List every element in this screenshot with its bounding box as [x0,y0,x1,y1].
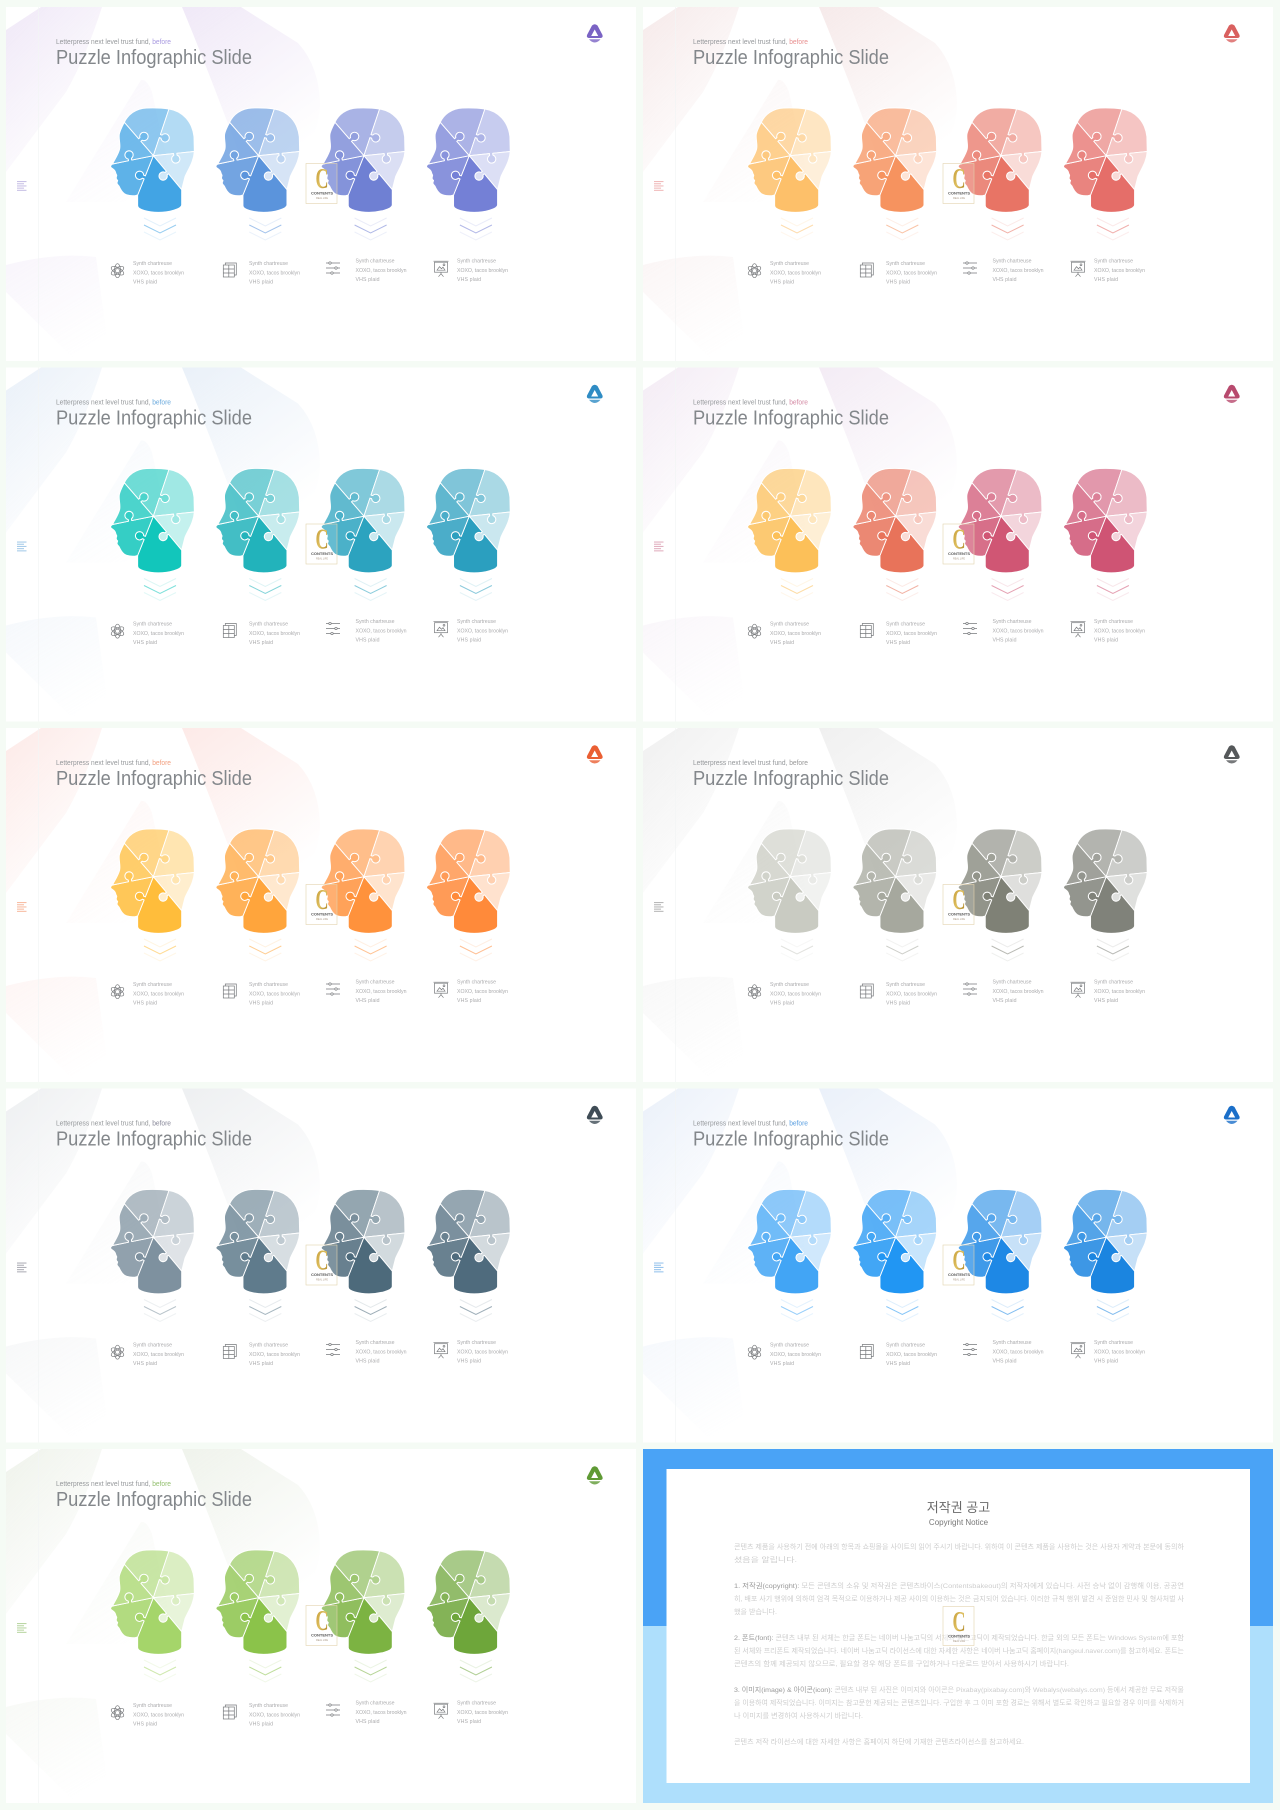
watermark: REAL LIFE [953,197,965,200]
caption 2: Synth chartreuse [886,622,925,628]
caption 4: Synth chartreuse [457,1340,496,1346]
caption 2: Synth chartreuse [249,1703,288,1709]
slide 6: warm grey [643,728,1273,1082]
background logo shapes [6,368,320,722]
slide 10: copyright notice [643,1449,1273,1803]
head 3 [321,829,405,961]
icon: presentation [434,1703,448,1719]
caption 1: Synth chartreuse [770,1342,809,1348]
watermark: CONTENTS [948,912,971,916]
caption 4: VHS plaid [457,998,481,1004]
caption 1: VHS plaid [770,1361,794,1367]
title: Puzzle Infographic Slide [56,1489,252,1511]
icon: presentation [434,982,448,998]
head 4 [1064,1189,1147,1322]
caption 3: XOXO, tacos brooklyn [992,628,1044,634]
caption 2: Synth chartreuse [249,1342,288,1348]
caption 3: VHS plaid [356,277,380,283]
icon: presentation [434,1343,448,1358]
head 4 [427,1189,510,1322]
caption 3: XOXO, tacos brooklyn [356,268,407,274]
head 3 [958,1189,1042,1322]
intro paragraph: 콘텐츠 제품을 사용하기 전에 아래의 항목과 쇼핑몰을 사이트의 읽어 주시기 바랍니다. 위하여 이 콘텐츠 제품을 사용하는 것은 사용자 계약과 본문에 동의하 [734,1542,1184,1551]
sidebar icon [654,902,664,912]
paragraph 3: image and icon: 나 이미지를 변경하여 사용하시기 바랍니다. [734,1711,863,1720]
caption 4: VHS plaid [457,1719,481,1725]
watermark: C [316,163,328,195]
watermark: REAL LIFE [316,558,328,560]
watermark: CONTENTS [311,912,334,916]
watermark: C [316,1244,328,1276]
caption 3: Synth chartreuse [356,1340,395,1346]
sidebar icon [17,542,26,551]
caption 4: Synth chartreuse [1094,980,1133,986]
title: Puzzle Infographic Slide [693,47,889,69]
caption 1: Synth chartreuse [770,982,809,988]
caption 1: XOXO, tacos brooklyn [770,270,821,276]
sidebar icon [17,902,26,912]
icon: sliders [326,1704,340,1716]
caption 1: XOXO, tacos brooklyn [133,991,184,997]
slide 8: blue [643,1088,1273,1442]
watermark [306,163,337,204]
watermark: CONTENTS [311,192,334,196]
subtitle: Letterpress next level trust fund, before [693,758,808,767]
logo [587,385,603,403]
caption 3: VHS plaid [992,638,1017,644]
caption 4: Synth chartreuse [1094,619,1133,625]
caption 1: XOXO, tacos brooklyn [133,631,184,637]
logo [587,1466,603,1484]
icon: atom [110,1706,125,1720]
head 2 [216,829,300,961]
head 2 [216,468,300,600]
caption 4: Synth chartreuse [457,1700,496,1706]
caption 1: Synth chartreuse [770,622,809,628]
caption 3: Synth chartreuse [992,619,1032,625]
watermark [943,1606,974,1646]
caption 4: Synth chartreuse [457,980,496,986]
caption 1: Synth chartreuse [133,622,172,628]
subtitle: Letterpress next level trust fund, before [693,1118,808,1128]
white notice card [666,1469,1250,1783]
paragraph 2: font: 콘텐츠의 함께 제공되지 않으므로, 필요할 경우 해당 폰트를 구입하거나 다운로드 받아서 사용하시기 바랍니다. [734,1659,1069,1668]
subtitle: Letterpress next level trust fund, before [56,1479,171,1488]
watermark: REAL LIFE [953,1640,965,1643]
icon: sliders [326,622,340,635]
sidebar icon [17,1623,26,1633]
subtitle: Letterpress next level trust fund, before [693,398,808,406]
caption 1: XOXO, tacos brooklyn [770,991,821,997]
caption 1: XOXO, tacos brooklyn [133,1352,184,1358]
icon: layers [860,1344,873,1358]
watermark [306,1244,337,1285]
caption 3: VHS plaid [356,638,380,644]
caption 2: XOXO, tacos brooklyn [886,991,937,997]
caption 2: XOXO, tacos brooklyn [249,631,300,637]
caption 3: Synth chartreuse [992,980,1032,986]
notice title: 저작권 공고 [927,1500,990,1515]
watermark: C [952,163,966,195]
head 4 [427,468,510,600]
watermark: C [952,1244,966,1276]
caption 2: Synth chartreuse [249,261,288,267]
watermark: CONTENTS [948,1273,971,1277]
caption 4: VHS plaid [1094,998,1118,1004]
paragraph 2: font: 2. 폰트(font): 콘텐츠 내부 된 서체는 한글 폰트는 네이버 나눔고딕의 서체와 맑은고딕이 제작되었습니다. 한글 외의 모든 폰트는 Windows System에 포함 [734,1635,1154,1642]
icon: sliders [963,262,977,274]
background logo shapes [643,368,957,722]
closing line: 콘텐츠 저작 라이선스에 대한 자세한 사항은 홈페이지 하단에 기재한 콘텐츠라이선스를 참고하세요. [734,1737,1024,1746]
icon: atom [747,264,762,278]
caption 2: VHS plaid [886,1000,910,1006]
slide 4: amber-crimson [643,368,1273,722]
watermark: C [952,1606,966,1638]
watermark: REAL LIFE [316,1639,328,1642]
icon: atom [747,1345,762,1359]
caption 3: Synth chartreuse [992,258,1032,264]
logo [1224,745,1240,764]
title: Puzzle Infographic Slide [693,408,889,430]
head 1 [111,1189,194,1322]
head 4 [427,1550,510,1682]
watermark: C [952,524,966,556]
title: Puzzle Infographic Slide [693,1128,889,1150]
icon: presentation [1070,1343,1086,1358]
title: Puzzle Infographic Slide [693,768,889,790]
head 2 [216,1550,300,1682]
icon: layers [860,984,873,998]
caption 2: Synth chartreuse [886,261,925,267]
sidebar icon [17,1262,26,1272]
caption 4: Synth chartreuse [1094,1340,1133,1346]
head 3 [321,1189,405,1322]
caption 1: VHS plaid [770,279,794,285]
watermark [943,884,974,924]
caption 1: XOXO, tacos brooklyn [133,270,184,276]
notice subtitle: Copyright Notice [929,1518,989,1527]
caption 4: XOXO, tacos brooklyn [457,268,508,274]
sidebar icon [654,542,664,551]
caption 4: XOXO, tacos brooklyn [1094,989,1145,995]
head 4 [1064,829,1147,961]
caption 1: VHS plaid [133,279,157,285]
icon: sliders [326,262,340,274]
watermark [943,163,974,204]
caption 3: VHS plaid [992,1358,1017,1364]
caption 2: VHS plaid [249,1000,273,1006]
caption 2: XOXO, tacos brooklyn [249,270,300,276]
caption 1: VHS plaid [770,1000,794,1006]
caption 1: Synth chartreuse [133,982,172,988]
icon: atom [110,624,125,638]
caption 4: Synth chartreuse [457,258,496,264]
head 2 [853,468,937,600]
caption 2: XOXO, tacos brooklyn [249,1352,300,1358]
caption 4: VHS plaid [457,1358,481,1364]
logo [587,745,603,764]
icon: sliders [326,983,340,995]
icon: layers [223,263,236,277]
icon: sliders [963,622,977,635]
caption 2: VHS plaid [249,640,273,646]
watermark: C [952,884,966,916]
paragraph 3: image and icon: 3. 이미지(image) & 아이콘(icon): 콘텐츠 내부 된 사진은 이미지와 아이콘은 Pixabay(pixabay.com)와 Webalys(webalys.com) 등에서 제공한 무료 저작물 [734,1687,1162,1694]
watermark: CONTENTS [311,552,334,556]
caption 3: VHS plaid [356,1719,380,1725]
icon: layers [223,624,236,638]
watermark: REAL LIFE [953,918,965,921]
caption 1: VHS plaid [133,1721,157,1727]
caption 4: Synth chartreuse [1094,258,1133,264]
icon: layers [223,1344,236,1358]
head 4 [427,108,510,240]
caption 1: VHS plaid [133,1361,157,1367]
icon: atom [747,985,762,999]
subtitle: Letterpress next level trust fund, before [56,758,171,767]
slide 5: yellow-orange [6,728,636,1082]
head 1 [111,468,194,600]
subtitle: Letterpress next level trust fund, before [56,398,171,406]
icon: atom [747,624,762,638]
caption 4: XOXO, tacos brooklyn [1094,628,1145,634]
caption 2: XOXO, tacos brooklyn [886,631,937,637]
caption 1: XOXO, tacos brooklyn [770,631,821,637]
icon: presentation [1070,622,1086,637]
background logo shapes [643,1088,957,1442]
slide 3: teal [6,368,636,722]
caption 4: VHS plaid [1094,638,1118,644]
icon: layers [860,624,873,638]
caption 3: Synth chartreuse [356,1700,395,1706]
caption 1: Synth chartreuse [770,261,809,267]
head 1 [748,468,831,600]
background logo shapes [643,728,957,1082]
caption 4: VHS plaid [1094,1358,1118,1364]
caption 1: XOXO, tacos brooklyn [133,1712,184,1718]
caption 3: XOXO, tacos brooklyn [992,1350,1044,1356]
watermark: REAL LIFE [316,1278,328,1282]
caption 3: VHS plaid [992,277,1017,283]
watermark: CONTENTS [948,552,971,556]
title: Puzzle Infographic Slide [56,408,252,430]
caption 2: Synth chartreuse [886,982,925,988]
logo [1224,1106,1240,1124]
head 1 [111,1550,194,1682]
caption 3: Synth chartreuse [356,258,395,264]
caption 4: XOXO, tacos brooklyn [457,628,508,634]
caption 2: VHS plaid [249,279,273,285]
head 4 [1064,468,1147,600]
watermark: CONTENTS [311,1273,334,1277]
sidebar icon [654,181,664,191]
watermark [943,1244,974,1285]
sidebar icon [654,1262,664,1272]
watermark [306,1605,337,1646]
title: Puzzle Infographic Slide [56,47,252,69]
icon: sliders [963,1343,977,1356]
icon: layers [223,984,236,998]
watermark [306,884,337,924]
icon: presentation [434,261,448,277]
caption 2: VHS plaid [886,279,910,285]
subtitle: Letterpress next level trust fund, before [56,37,171,46]
watermark: C [316,1605,328,1637]
logo [587,1106,603,1124]
head 1 [748,1189,831,1322]
paragraph 2: font: 된 서체와 프리폰트 제작되었습니다. 네이버 나눔고딕 라이선스에 대한 자세한 사항은 네이버 나눔고딕 홈페이지(hangeul.naver.com)를 참고하세요. 폰트는 [734,1646,1184,1655]
watermark: C [316,884,328,916]
subtitle: Letterpress next level trust fund, before [56,1118,171,1128]
caption 1: VHS plaid [133,1000,157,1006]
icon: presentation [1070,261,1086,277]
head 3 [958,108,1042,240]
slide 1: purple-blue [6,7,636,361]
caption 4: XOXO, tacos brooklyn [457,989,508,995]
head 2 [853,829,937,961]
icon: presentation [1070,982,1086,998]
icon: layers [223,1705,236,1719]
caption 3: Synth chartreuse [356,980,395,986]
paragraph 1: copyright: 했을 받습니다. [734,1607,777,1616]
watermark: REAL LIFE [953,558,965,560]
head 1 [111,108,194,240]
caption 2: VHS plaid [886,640,910,646]
slide 7: blue grey [6,1088,636,1442]
slide 9: green [6,1449,636,1803]
paragraph 1: copyright: 히, 배포 사기 행위에 의하여 엄격 목적으로 이용하거나 제공 사이의 이용하는 것은 금지되어 있습니다. 이러한 규칙 행위 발견 시 준엄한 민사 및 형사처벌 사 [734,1594,1184,1603]
background logo shapes [643,7,957,361]
watermark: CONTENTS [948,192,971,196]
icon: presentation [434,622,448,637]
watermark [306,524,337,564]
caption 1: Synth chartreuse [133,1703,172,1709]
intro paragraph: 셨음을 알립니다. [734,1555,797,1564]
background logo shapes [6,1449,320,1803]
head 2 [853,1189,937,1322]
watermark: CONTENTS [948,1634,971,1638]
caption 3: VHS plaid [992,998,1017,1004]
watermark: REAL LIFE [316,197,328,200]
watermark: C [316,524,328,556]
caption 1: VHS plaid [133,640,157,646]
head 3 [958,468,1042,600]
head 3 [321,468,405,600]
paragraph 3: image and icon: 을 이용하여 제작되었습니다. 이미지는 참고문헌 제공되는 콘텐츠입니다. 구입한 후 그 이미 포함 경로는 위해서 별도로 확인하고 필요할 경우 이미를 삭제하거 [734,1698,1184,1707]
caption 3: XOXO, tacos brooklyn [356,989,407,995]
caption 4: XOXO, tacos brooklyn [1094,268,1145,274]
watermark: REAL LIFE [316,918,328,921]
caption 3: Synth chartreuse [992,1340,1032,1346]
head 1 [111,829,194,961]
caption 3: XOXO, tacos brooklyn [356,1350,407,1356]
background logo shapes [6,728,320,1082]
caption 4: XOXO, tacos brooklyn [457,1710,508,1716]
head 4 [1064,108,1147,240]
background logo shapes [6,1088,320,1442]
caption 2: VHS plaid [249,1361,273,1367]
head 3 [958,829,1042,961]
paragraph 1: copyright: 1. 저작권(copyright): 모든 콘텐츠의 소유 및 저작권은 콘텐츠바이스(Contentsbakeout)의 저작자에게 있습니다. 사전 승낙 없이 감행해 이용, 공공연 [734,1583,1144,1590]
caption 2: XOXO, tacos brooklyn [249,1712,300,1718]
caption 3: XOXO, tacos brooklyn [992,268,1044,274]
sidebar icon [17,181,26,191]
icon: sliders [963,983,977,995]
title: Puzzle Infographic Slide [56,768,252,790]
caption 3: XOXO, tacos brooklyn [356,628,407,634]
caption 3: Synth chartreuse [356,619,395,625]
caption 4: VHS plaid [1094,277,1118,283]
caption 4: VHS plaid [457,638,481,644]
head 3 [321,108,405,240]
caption 3: XOXO, tacos brooklyn [992,989,1044,995]
head 3 [321,1550,405,1682]
subtitle: Letterpress next level trust fund, before [693,37,808,46]
caption 1: Synth chartreuse [133,1342,172,1348]
head 2 [216,108,300,240]
background logo shapes [6,7,320,361]
logo [1224,24,1240,42]
caption 4: XOXO, tacos brooklyn [457,1350,508,1356]
caption 2: Synth chartreuse [886,1342,925,1348]
caption 2: Synth chartreuse [249,622,288,628]
logo [587,24,603,42]
caption 1: VHS plaid [770,640,794,646]
head 1 [748,829,831,961]
icon: sliders [326,1343,340,1356]
icon: layers [860,263,873,277]
caption 2: XOXO, tacos brooklyn [886,270,937,276]
caption 1: Synth chartreuse [133,261,172,267]
watermark [943,524,974,564]
icon: atom [110,264,125,278]
caption 4: Synth chartreuse [457,619,496,625]
title: Puzzle Infographic Slide [56,1128,252,1150]
caption 3: XOXO, tacos brooklyn [356,1710,407,1716]
caption 2: Synth chartreuse [249,982,288,988]
logo [1224,385,1240,403]
icon: atom [110,985,125,999]
caption 2: XOXO, tacos brooklyn [249,991,300,997]
head 2 [853,108,937,240]
head 4 [427,829,510,961]
caption 2: VHS plaid [886,1361,910,1367]
slide 2: orange-red [643,7,1273,361]
caption 1: XOXO, tacos brooklyn [770,1352,821,1358]
caption 3: VHS plaid [356,1358,380,1364]
head 1 [748,108,831,240]
watermark: REAL LIFE [953,1278,965,1282]
caption 4: VHS plaid [457,277,481,283]
head 2 [216,1189,300,1322]
caption 2: VHS plaid [249,1721,273,1727]
caption 2: XOXO, tacos brooklyn [886,1352,937,1358]
icon: atom [110,1345,125,1359]
caption 3: VHS plaid [356,998,380,1004]
watermark: CONTENTS [311,1634,334,1638]
caption 4: XOXO, tacos brooklyn [1094,1350,1145,1356]
